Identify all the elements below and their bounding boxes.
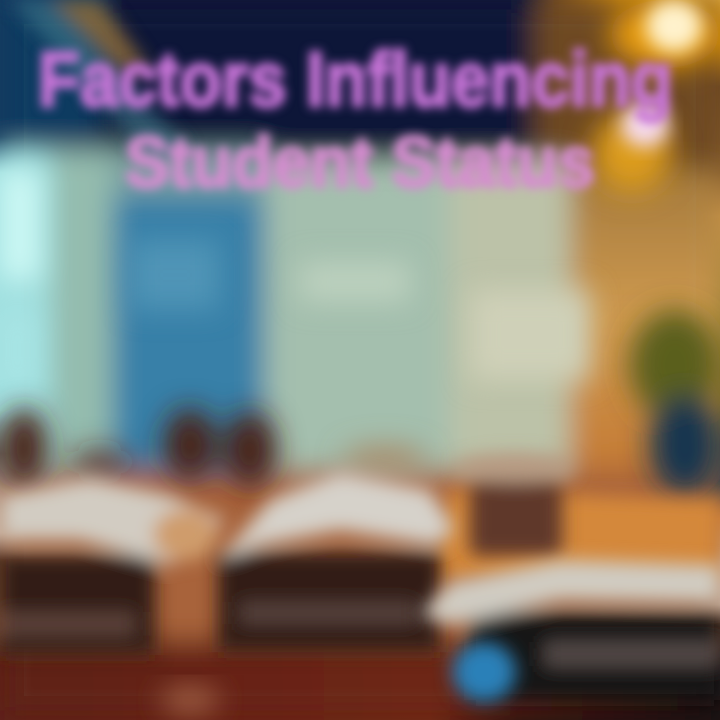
- open book: left: [0, 478, 225, 655]
- title: [38, 35, 673, 203]
- dark silhouettes behind books: [0, 408, 427, 488]
- table: [430, 490, 720, 580]
- icon: blue ball: [452, 642, 516, 702]
- window highlights: [0, 170, 590, 390]
- book stack: right: [420, 560, 720, 700]
- title: Student Status: [125, 123, 595, 203]
- icon: hanging lamp lights: [592, 0, 720, 192]
- mug: [457, 454, 573, 556]
- lower highlight on table: [160, 686, 220, 714]
- diagonal light beam: [10, 0, 190, 160]
- plant and dark vase: [630, 310, 720, 495]
- open book: centre: [218, 472, 455, 652]
